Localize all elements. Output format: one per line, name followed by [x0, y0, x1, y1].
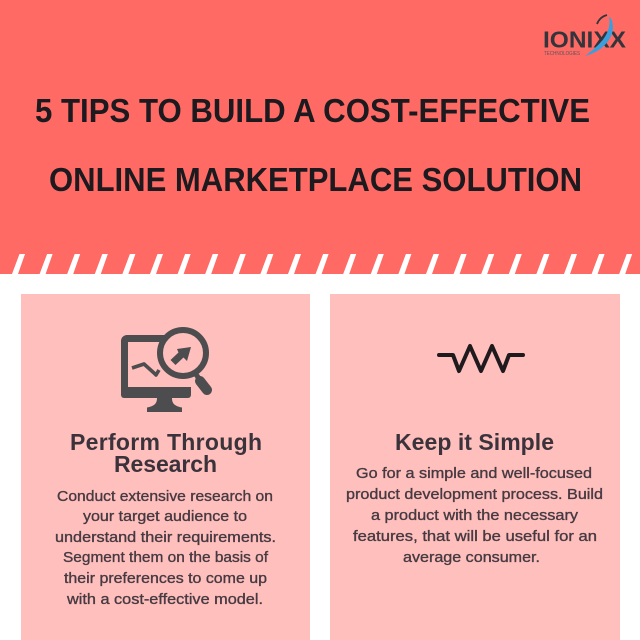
- panel: Keep it Simple: [330, 294, 620, 640]
- heading: [70, 429, 262, 477]
- logo: Ionixx: IONIXX: [543, 26, 627, 52]
- panel: Perform Through Research: [21, 294, 310, 640]
- text block: Segment them on the basis of: [63, 549, 269, 566]
- text block: understand their requirements.: [55, 529, 276, 546]
- header band: [0, 0, 640, 274]
- heading: Keep it Simple: [395, 429, 554, 455]
- text block: [346, 465, 603, 566]
- heading: Perform Through: [70, 429, 262, 455]
- icon: resistor zigzag: [439, 346, 523, 371]
- title: [35, 92, 590, 198]
- text block: with a cost-effective model.: [66, 591, 263, 608]
- text block: product development process. Build: [346, 486, 603, 503]
- text block: features, that will be useful for an: [353, 528, 597, 545]
- text block: Go for a simple and well-focused: [356, 465, 592, 482]
- icon: monitor with magnifying glass: [121, 330, 207, 412]
- logo: Ionixx: [543, 15, 627, 57]
- text block: Conduct extensive research on: [57, 488, 273, 505]
- title: ONLINE MARKETPLACE SOLUTION: [49, 161, 582, 198]
- text block: [55, 488, 276, 608]
- title: 5 TIPS TO BUILD A COST-EFFECTIVE: [35, 92, 590, 129]
- text block: their preferences to come up: [64, 570, 267, 587]
- text block: a product with the necessary: [371, 507, 579, 524]
- heading: Research: [114, 451, 217, 477]
- text block: your target audience to: [83, 508, 247, 525]
- logo: Ionixx: TECHNOLOGIES: [544, 51, 581, 57]
- text block: average consumer.: [403, 549, 540, 566]
